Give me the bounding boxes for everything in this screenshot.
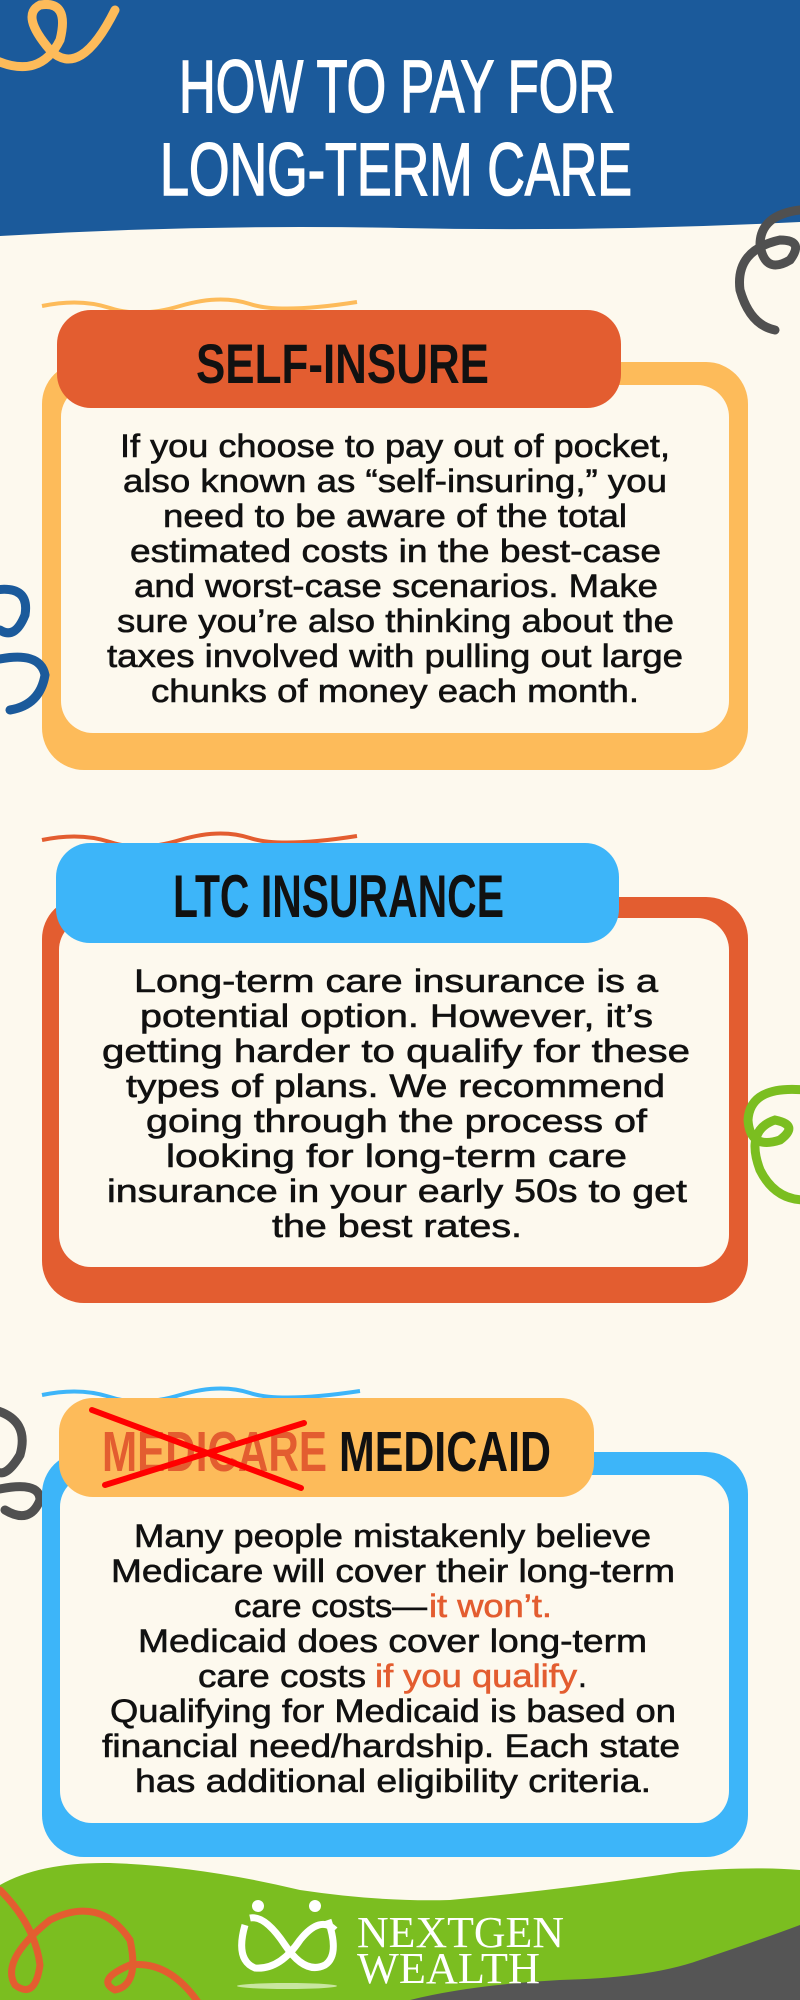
body text: estimated costs in the best-case xyxy=(130,533,661,569)
heading pill: MEDICAID xyxy=(339,1420,551,1484)
wave line xyxy=(42,299,357,313)
heading pill: MEDICARE xyxy=(102,1420,327,1484)
body text: financial need/hardship. Each state xyxy=(102,1728,680,1764)
scribble: top-left orange xyxy=(0,4,115,67)
body text xyxy=(107,428,683,709)
scribble: bottom-left orange xyxy=(0,1890,200,2000)
body text: Medicare will cover their long-term xyxy=(111,1553,675,1589)
wave line xyxy=(42,1388,360,1402)
body text: Medicaid does cover long-term xyxy=(138,1623,647,1659)
scribble: left blue xyxy=(0,589,45,710)
body text: and worst-case scenarios. Make xyxy=(134,568,658,604)
body text: need to be aware of the total xyxy=(163,498,627,534)
body text: insurance in your early 50s to get xyxy=(107,1173,687,1209)
logo: NEXTGEN xyxy=(357,1908,564,1957)
wave line xyxy=(42,833,357,847)
scribble: right gray xyxy=(740,210,800,330)
panel: medicaid xyxy=(42,1388,748,1857)
body text: Qualifying for Medicaid is based on xyxy=(110,1693,676,1729)
body text: care costs— xyxy=(234,1588,427,1624)
heading pill xyxy=(59,1398,594,1497)
heading pill: LTC INSURANCE xyxy=(173,863,504,930)
title: HOW TO PAY FOR xyxy=(179,45,615,128)
body text xyxy=(102,963,690,1244)
logo xyxy=(237,1900,564,1993)
body text: If you choose to pay out of pocket, xyxy=(120,428,670,464)
panel: LTC insurance xyxy=(42,833,748,1303)
body text: potential option. However, it’s xyxy=(140,998,653,1034)
body text: if you qualify xyxy=(375,1658,577,1694)
body text: Many people mistakenly believe xyxy=(134,1518,651,1554)
body text: going through the process of xyxy=(146,1103,647,1139)
body text: types of plans. We recommend xyxy=(126,1068,665,1104)
body text: care costs xyxy=(198,1658,366,1694)
header band xyxy=(0,0,800,236)
body text: also known as “self-insuring,” you xyxy=(123,463,667,499)
logo: WEALTH xyxy=(357,1944,540,1993)
heading pill: SELF-INSURE xyxy=(196,332,489,395)
body text: sure you’re also thinking about the xyxy=(117,603,674,639)
heading pill xyxy=(57,310,621,408)
body text: the best rates. xyxy=(272,1208,522,1244)
body text: looking for long-term care xyxy=(166,1138,627,1174)
body text: has additional eligibility criteria. xyxy=(135,1763,651,1799)
red cross xyxy=(92,1410,304,1488)
body text: getting harder to qualify for these xyxy=(102,1033,690,1069)
body text: . xyxy=(578,1658,587,1694)
body text: it won’t. xyxy=(429,1588,552,1624)
body text: Long-term care insurance is a xyxy=(134,963,658,999)
title xyxy=(160,45,632,211)
heading pill xyxy=(56,843,619,943)
footer xyxy=(0,1863,800,2000)
scribble: left gray xyxy=(0,1410,40,1516)
body text xyxy=(102,1518,680,1799)
body text: taxes involved with pulling out large xyxy=(107,638,683,674)
panel: self-insure xyxy=(42,299,748,770)
scribble: right green xyxy=(748,1089,800,1200)
body text: chunks of money each month. xyxy=(151,673,639,709)
